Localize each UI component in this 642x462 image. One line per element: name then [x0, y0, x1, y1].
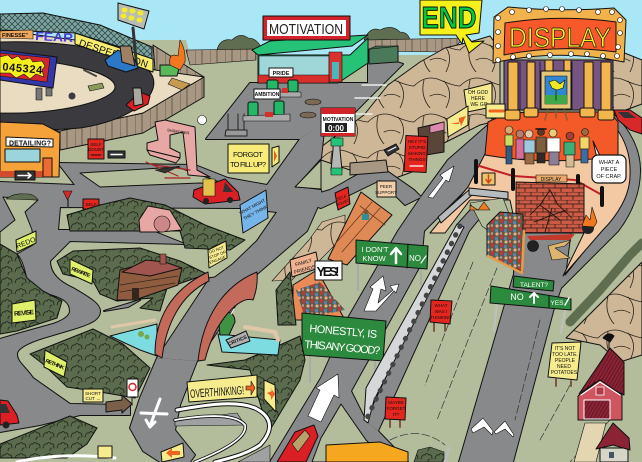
short cut sign: [83, 389, 103, 402]
yield sign: [63, 191, 72, 207]
no entry sign: [127, 379, 138, 405]
rethink sign: [44, 350, 67, 377]
station door: [329, 52, 342, 82]
broken guard rail: [438, 188, 508, 223]
banner: finesse: FINESSE": [2, 33, 28, 39]
field cracks: [390, 262, 610, 462]
small black arrow sign: [384, 144, 399, 156]
peer support sign: [375, 181, 397, 197]
arrow: top road: [428, 166, 454, 198]
speech bubble: OF CRAP.: [596, 174, 622, 180]
red car left: [0, 400, 19, 428]
forest: top island: [67, 198, 245, 250]
i don't know sign: I DON'T: [362, 245, 389, 254]
brick wall: [516, 175, 584, 233]
orange building: [0, 122, 60, 180]
sand at display: [430, 128, 630, 276]
blue billboard: [238, 190, 268, 233]
rewrite sign: REWRITE: [70, 266, 91, 280]
visitor white: [547, 129, 560, 165]
dirt path: [574, 423, 606, 462]
distant bushes: [217, 27, 410, 50]
forgot to fill up sign: TO FILL UP?: [230, 160, 266, 169]
hey it's stupid sign: THINGS: [408, 157, 426, 162]
speech bubble: PIECE: [601, 167, 618, 173]
self doubt sign upper: SELF: [90, 142, 102, 147]
red sports car: [277, 425, 318, 462]
gallery visitors: [505, 126, 589, 167]
it's not too late sign: [548, 342, 581, 386]
it's not too late sign: NEED: [557, 364, 571, 370]
short cut sign: CUT →: [86, 396, 100, 401]
honestly sign: HONESTLY, IS: [309, 323, 378, 341]
forest: bottom left: [0, 416, 97, 458]
weather vane: [603, 334, 614, 348]
forgot to fill up sign: FORGOT: [233, 150, 263, 159]
family and friends sign: FRIENDS: [293, 264, 317, 276]
honestly sign: THIS ANY GOOD?: [304, 339, 381, 357]
station skirt: [258, 75, 329, 83]
pump islands: [243, 92, 301, 121]
red race car: [126, 88, 150, 111]
red cans: [265, 88, 288, 117]
painting on easel: [541, 71, 571, 120]
i don't know sign: [356, 240, 428, 290]
yes speech: YES!: [316, 264, 340, 279]
marquee: [493, 7, 626, 63]
revise sign: [12, 300, 36, 323]
motivation counter sign: MOTIVATION: [323, 117, 354, 123]
red car with painting: [193, 179, 240, 204]
motivation roof sign: MOTIVATION: [269, 21, 343, 38]
peer support sign: SUPPORT: [375, 190, 397, 195]
barn doors: [584, 400, 610, 419]
overthinking side arrow: [264, 380, 276, 412]
fire at wall: [582, 207, 597, 234]
visitor pink: [516, 130, 524, 159]
arrow: cross: [141, 399, 167, 427]
barn: [578, 334, 624, 420]
dumpster: [369, 46, 398, 64]
lower left ramp: [17, 456, 115, 462]
scoreboard: [0, 50, 57, 100]
hillside rocks: [321, 36, 642, 362]
rewrite sign: [70, 259, 93, 284]
stone bridge: [155, 272, 257, 361]
building door: [43, 158, 52, 177]
it's not too late sign: PEOPLE: [555, 358, 576, 364]
visitor blue: [524, 130, 535, 164]
self doubt sign upper: [88, 139, 104, 159]
log cabin: [117, 254, 182, 300]
hey it's stupid sign: MAKING: [408, 151, 426, 156]
pink stand: [418, 122, 444, 156]
banner: finesse: [0, 30, 33, 39]
pumps: [248, 80, 298, 117]
white ramp: [175, 404, 270, 462]
family and friends sign: FAMILY: [295, 258, 314, 268]
gas station: [243, 16, 386, 121]
yes speech: [315, 261, 342, 280]
blue billboard: THEY THINK: [242, 204, 268, 221]
track infield: [0, 58, 115, 113]
yellow truck: [326, 442, 408, 462]
rubble: [527, 234, 575, 260]
self doubt sign right: [335, 187, 350, 210]
red car behind display: [614, 110, 642, 134]
hourglass bushes: [6, 194, 38, 200]
ambition sign: AMBITION: [255, 92, 280, 98]
critics sign: CRITICS: [227, 334, 249, 348]
honestly sign: [302, 313, 386, 382]
it's not too late sign: TOO LATE.: [552, 352, 578, 358]
burning wreck: [160, 40, 190, 90]
end sign: END: [422, 0, 476, 35]
velvet rope: [476, 161, 602, 205]
revise sign: REVISE: [14, 309, 35, 318]
pink excavator: [146, 120, 210, 178]
station roof: [252, 35, 368, 55]
peer support sign: PEER: [380, 184, 393, 189]
arrow sign: [15, 171, 35, 180]
motivation roof sign: [263, 16, 350, 40]
rocks by family stand: [272, 215, 345, 281]
orange arrow sign: [272, 146, 279, 167]
plaza lines: [355, 85, 386, 114]
manholes: [300, 99, 321, 118]
ambition sign: [254, 89, 280, 99]
visitor green: [564, 132, 575, 167]
track: [0, 42, 154, 130]
arrow: forked: [364, 276, 399, 311]
orange stand: [293, 270, 345, 320]
station body: [258, 38, 368, 83]
wooden fences: [60, 38, 464, 150]
hey it's stupid sign: [404, 135, 428, 173]
forest: rewrite: [57, 248, 207, 311]
marquee panel: [504, 18, 616, 55]
self doubt sign lower: SELF: [85, 202, 97, 207]
maybe forget it sign: FORGET: [387, 406, 406, 411]
racetrack stadium: [0, 13, 204, 131]
detailing sign: DETAILING?: [9, 140, 51, 148]
overthinking sign: OVERTHINKING!: [190, 383, 244, 401]
blue car: [105, 46, 138, 72]
visitor brown: [536, 128, 546, 163]
arrow sign at display: [447, 106, 468, 137]
floodlight tower: [118, 3, 149, 70]
small arrow sign: [482, 173, 495, 185]
steam puff: [198, 116, 206, 124]
it's not too late sign: IT'S NOT: [555, 346, 575, 352]
arrow sign lower: [107, 214, 123, 220]
lower orange arrow sign: [161, 443, 184, 462]
banner: desperation: DESPERATION: [77, 38, 149, 71]
maybe forget it sign: [385, 397, 406, 427]
rethink sign: RETHINK: [44, 358, 65, 371]
self doubt sign lower: DOUBT: [83, 207, 99, 212]
banner: fear: FEAR: [35, 29, 74, 45]
ramp pillar: [238, 445, 270, 462]
do not stop sign: [208, 241, 227, 268]
scoreboard: 045324: [2, 61, 44, 77]
station window: [259, 56, 329, 76]
redo sign: REDO: [15, 236, 37, 250]
blue billboard: WHAT MIGHT: [238, 198, 266, 216]
hey it's stupid sign: STUPID: [409, 145, 426, 150]
talent sign: TALENT?: [520, 282, 548, 289]
self doubt sign right: DOUBT: [335, 198, 350, 207]
white chevrons: [471, 418, 514, 437]
forest: rethink: [30, 329, 150, 398]
bulbs: [496, 6, 622, 62]
what was i thinking sign: WHAT: [435, 303, 448, 308]
hey it's stupid sign: HEY IT'S: [408, 139, 426, 144]
infield debris: [68, 70, 104, 100]
visitor tan: [580, 128, 589, 163]
critics sign: [226, 331, 250, 348]
bushes bottom: [414, 447, 444, 462]
family and friends sign: [290, 252, 319, 277]
crowd on stand: [296, 282, 345, 318]
oh god sign: [464, 83, 492, 112]
do not stop sign: STOP OR: [208, 249, 227, 260]
wall display plaque: DISPLAY: [541, 177, 562, 183]
forgot to fill up sign: [228, 144, 269, 173]
wooden arrow: [106, 395, 132, 413]
speech bubble: [592, 141, 626, 183]
parts rack: [225, 114, 247, 136]
columns: [505, 60, 614, 120]
bottom post: [445, 448, 449, 462]
spiky pink machine: [139, 206, 182, 232]
oh god sign: HERE: [471, 96, 486, 102]
guardrail barrier: [364, 224, 464, 423]
small yellow sign: [98, 446, 112, 458]
motivation counter sign: [321, 108, 355, 175]
do not stop sign: ENGAGE: [209, 254, 227, 265]
visitor yellow: [505, 126, 513, 164]
pride sign: [269, 68, 293, 77]
display building: [485, 6, 626, 161]
barn roof: [579, 348, 624, 395]
i don't know sign: NO: [409, 254, 421, 263]
overthinking sign: [187, 375, 257, 402]
arrow sign upper: [108, 151, 125, 158]
track sand surround: [0, 30, 204, 131]
what was i thinking sign: THINKING: [430, 315, 452, 320]
pond right: [218, 327, 280, 355]
pile of rejected people: [487, 212, 524, 273]
bench figure: [362, 210, 369, 220]
talent sign: [490, 276, 571, 333]
pride sign: PRIDE: [273, 71, 290, 77]
motivation counter sign: 0:00: [328, 124, 345, 133]
orange bench: [328, 192, 392, 265]
what was i thinking sign: WAS I: [435, 309, 447, 314]
broken fence: [350, 160, 388, 175]
building window: [5, 149, 40, 162]
second arrow sign: [486, 104, 505, 118]
forest: revise: [0, 244, 62, 334]
pond left: [110, 320, 157, 356]
grass wedge below rope: [470, 198, 516, 232]
excavator rubble: [155, 166, 180, 173]
background: sky: [0, 0, 642, 70]
barn wall: [578, 380, 622, 420]
barn window: [596, 387, 604, 395]
self doubt sign right: SELF: [336, 193, 348, 202]
it's not too late sign: POTATOES: [551, 370, 578, 376]
oh god sign: OH GOD: [468, 90, 489, 96]
farmhouse: [596, 423, 630, 462]
chain link fence: [0, 13, 152, 72]
forest: right of bridge: [207, 336, 305, 430]
what was i thinking sign: [430, 300, 452, 331]
bench slats: [335, 202, 385, 252]
arrow: main road: [308, 374, 339, 422]
short cut sign: SHORT: [85, 391, 101, 396]
self doubt sign lower: [83, 199, 99, 218]
maybe forget it sign: MAYBE: [388, 400, 404, 405]
pink excavator: SHREDDER: [167, 127, 190, 136]
marquee title: DISPLAY: [509, 22, 611, 53]
i don't know sign: KNOW: [362, 254, 387, 263]
redo sign: [15, 231, 37, 252]
self doubt sign upper: DOUBT: [88, 147, 104, 152]
talent sign: NO: [510, 292, 524, 302]
swamp monster: [218, 307, 235, 335]
rock forest strip: [570, 243, 642, 322]
talent sign: YES: [550, 300, 564, 307]
forest: family: [276, 272, 296, 325]
speech bubble: WHAT A: [599, 160, 620, 166]
end sign: [420, 0, 484, 53]
stage: [485, 112, 618, 161]
grass islands: [0, 160, 390, 462]
do not stop sign: DO NOT: [208, 244, 225, 255]
maybe forget it sign: IT?: [393, 412, 400, 417]
ramp wall strip: [175, 413, 245, 426]
oh god sign: WE GO: [470, 102, 488, 108]
curtains: [504, 60, 613, 110]
